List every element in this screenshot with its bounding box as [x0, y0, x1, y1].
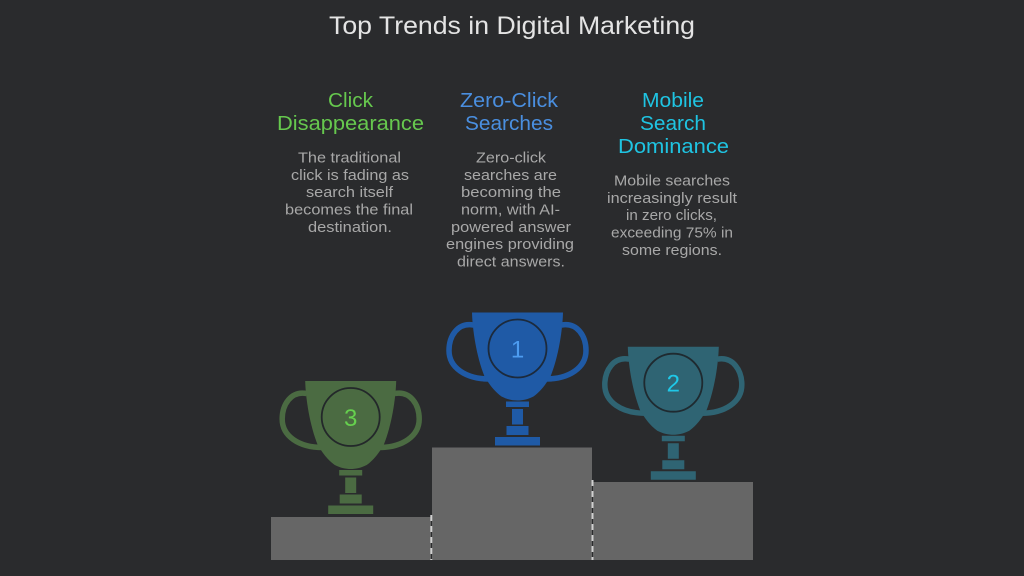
text block: zero-click description: powered answer [451, 220, 571, 236]
text block: mobile search description: some regions. [622, 243, 722, 259]
icon: trophy third place [282, 381, 419, 514]
icon: trophy third place: 3 [344, 405, 357, 432]
heading: zero-click searches [460, 90, 559, 135]
heading: click disappearance: Disappearance [277, 113, 424, 135]
heading: mobile search dominance: Search [640, 113, 706, 135]
heading: mobile search dominance [618, 90, 729, 158]
heading: click disappearance: Click [328, 90, 374, 112]
podium step: third place [271, 517, 431, 560]
text block: click disappearance description: destination. [308, 220, 392, 236]
text block: zero-click description: norm, with AI- [461, 202, 560, 218]
text block: zero-click description: direct answers. [457, 254, 565, 270]
text block: zero-click description: searches are [464, 168, 557, 184]
text block: click disappearance description: search itself [306, 185, 394, 201]
panel: click disappearance text [277, 90, 424, 236]
text block: zero-click description: becoming the [461, 185, 561, 201]
icon: trophy first place [449, 312, 586, 446]
heading: zero-click searches: Searches [465, 113, 553, 135]
icon: trophy first place: 1 [511, 336, 524, 364]
panel: mobile search dominance text [607, 90, 737, 259]
text block: click disappearance description: The traditional [298, 150, 401, 166]
text block: zero-click description [446, 150, 574, 270]
heading: zero-click searches: Zero-Click [460, 90, 559, 112]
text block: mobile search description: in zero clicks, [626, 208, 717, 224]
text block: click disappearance description: click is fading as [291, 168, 409, 184]
icon: trophy second place: 2 [667, 371, 680, 398]
podium step: second place [593, 482, 753, 560]
podium step: first place [432, 448, 592, 560]
text block: mobile search description: increasingly result [607, 191, 737, 207]
heading: click disappearance [277, 90, 424, 135]
panel: zero-click searches text [446, 90, 574, 270]
icon: trophy second place [605, 347, 742, 480]
heading: mobile search dominance: Mobile [642, 90, 704, 112]
heading: mobile search dominance: Dominance [618, 136, 729, 158]
text block: mobile search description [607, 174, 737, 259]
text block: zero-click description: Zero-click [476, 150, 547, 166]
text block: mobile search description: exceeding 75% in [611, 226, 733, 242]
title: Top Trends in Digital Marketing [329, 12, 695, 40]
text block: mobile search description: Mobile searches [614, 174, 730, 190]
text block: zero-click description: engines providing [446, 237, 574, 253]
text block: click disappearance description [285, 150, 413, 236]
text block: click disappearance description: becomes the final [285, 202, 413, 218]
